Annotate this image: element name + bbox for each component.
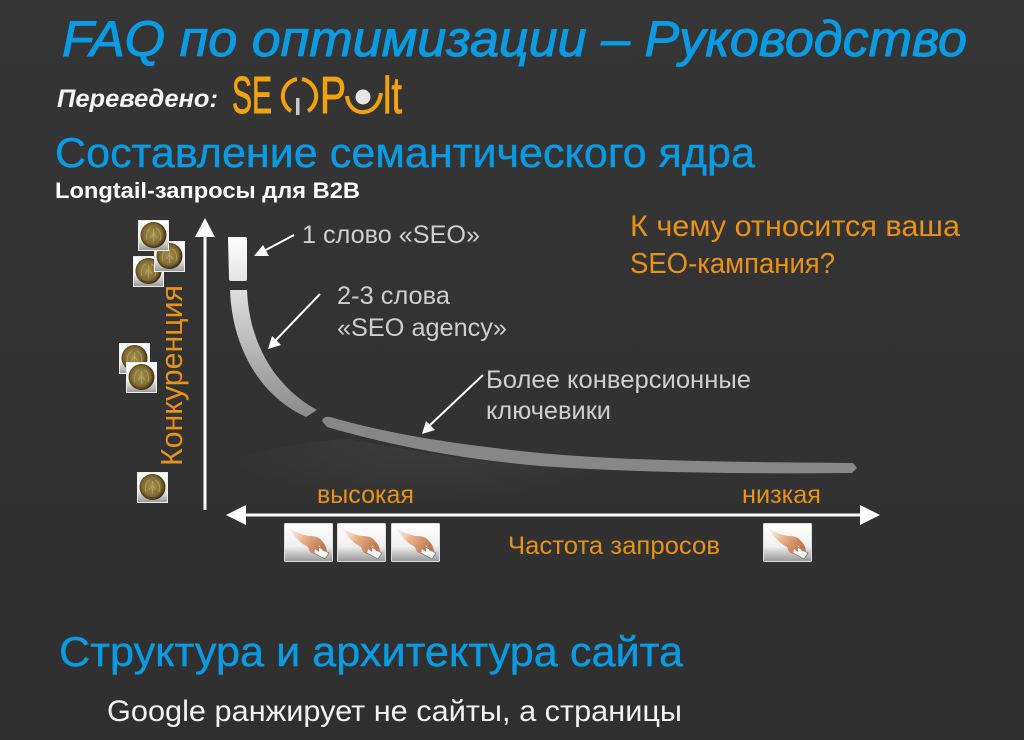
logo: SEOPult: P [320, 67, 346, 125]
axis: competition arrow [195, 218, 215, 510]
translated by label: Переведено: [57, 85, 218, 113]
coin icons: medium competition [120, 344, 156, 392]
curve segment: two to three words [230, 290, 317, 417]
arrow: more converting keywords [422, 375, 483, 434]
label: more converting keywords: ключевики [486, 397, 611, 425]
label: two to three words: «SEO agency» [337, 314, 507, 342]
coin icon: low competition [138, 472, 168, 502]
label: more converting keywords: Более конверсионные [486, 366, 751, 394]
label: one word: 1 слово «SEO» [302, 221, 480, 249]
label: more converting keywords [486, 366, 751, 425]
axis label: query frequency: Частота запросов [508, 532, 720, 560]
axis label: competition: Конкуренция [154, 285, 189, 466]
label: two to three words: 2-3 слова [337, 282, 450, 310]
subheading: longtail: Longtail-запросы для B2B [55, 178, 360, 203]
axis: frequency arrow [226, 505, 880, 525]
heading: semantic core: Составление семантического ядра [55, 129, 756, 176]
curve segment: long tail [322, 417, 857, 473]
mouse icon: low frequency [764, 524, 812, 562]
logo: SEOPult: SE [232, 67, 272, 125]
label: low frequency: низкая [742, 481, 821, 509]
callout question: К чему относится ваша [630, 210, 960, 243]
logo: SEOPult [232, 67, 402, 125]
arrow: two to three words [268, 294, 320, 349]
title: FAQ по оптимизации – Руководство [62, 11, 967, 67]
chart: longtail curve [228, 237, 857, 473]
heading: site structure: Структура и архитектура сайта [59, 628, 684, 675]
logo: SEOPult: lt [383, 67, 402, 125]
arrow: one word [254, 235, 294, 256]
label: two to three words [337, 282, 507, 342]
callout question: SEO-кампания? [630, 248, 835, 280]
label: high frequency: высокая [317, 481, 414, 509]
text: Google ranks pages: Google ранжирует не сайты, а страницы [107, 695, 682, 728]
callout question [630, 210, 960, 280]
mouse icons: high frequency [284, 524, 440, 562]
curve segment: one word [228, 237, 247, 281]
coin icons: high competition [134, 220, 184, 286]
